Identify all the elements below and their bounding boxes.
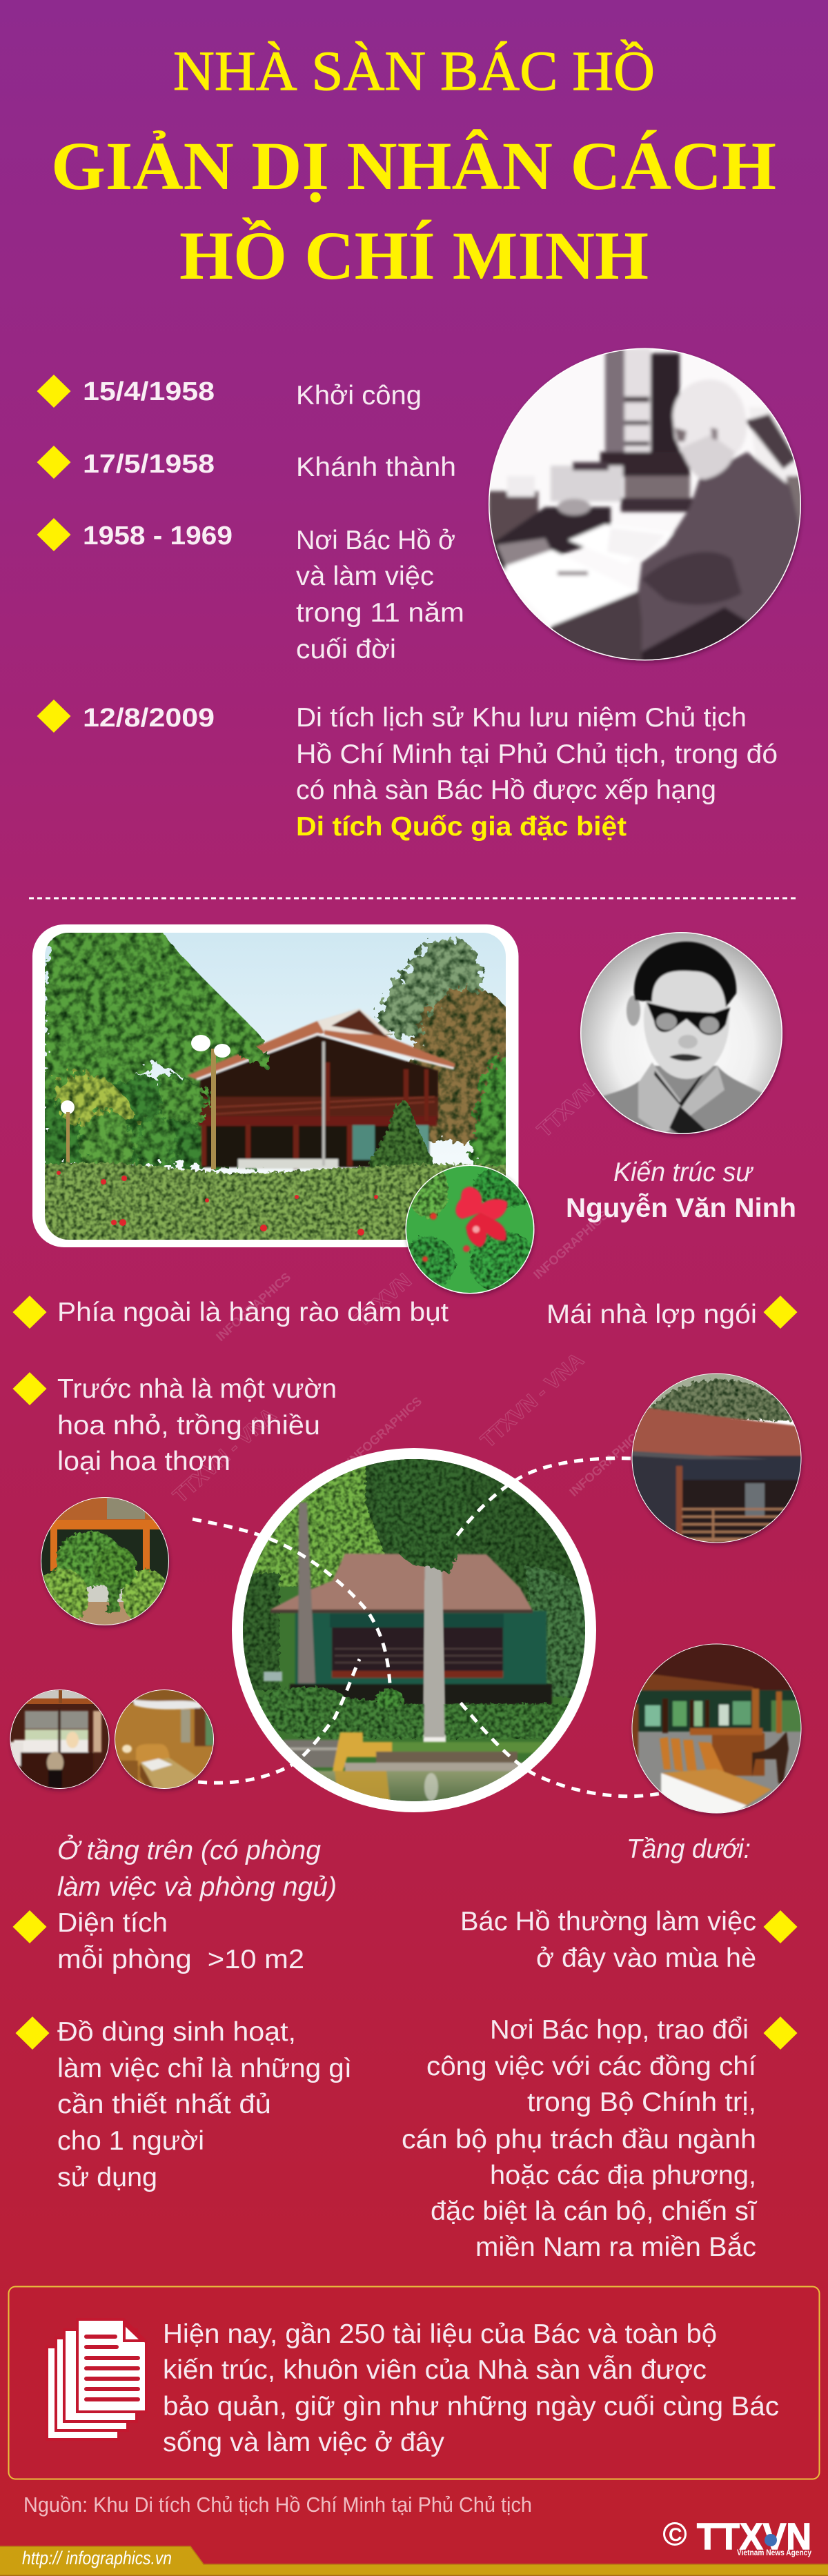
- timeline item 15/4/1958: [37, 375, 422, 410]
- watermarks: INFOGRAPHICS: [531, 1208, 611, 1282]
- watermarks: [169, 1080, 647, 1507]
- architect caption: Nguyễn Văn Ninh: [566, 1193, 796, 1223]
- timeline item 17/5/1958: 17/5/1958: [83, 450, 215, 479]
- architect caption: [566, 1158, 796, 1223]
- note: lower floor meetings: Nơi Bác họp, trao đổi: [490, 2015, 749, 2045]
- note: upper floor rooms: mỗi phòng >10 m2: [57, 1945, 304, 1974]
- photo: hibiscus: [400, 1162, 542, 1297]
- note: roof: Mái nhà lợp ngói: [546, 1300, 757, 1329]
- note: flower garden: loại hoa thơm: [57, 1447, 230, 1476]
- callout text: [163, 2319, 779, 2457]
- note: lower floor meetings: đặc biệt là cán bộ, chiến sĩ: [431, 2197, 758, 2226]
- photo: lower floor hall: [628, 1642, 807, 1818]
- timeline item 12/8/2009: 12/8/2009: [83, 704, 215, 733]
- timeline item 1958 - 1969: trong 11 năm: [296, 598, 464, 628]
- callout text: kiến trúc, khuôn viên của Nhà sàn vẫn được: [163, 2355, 707, 2385]
- note: upper floor furniture: cần thiết nhất đủ: [57, 2090, 271, 2119]
- divider: [29, 897, 798, 900]
- timeline item 1958 - 1969: và làm việc: [296, 562, 434, 591]
- timeline item 1958 - 1969: Nơi Bác Hồ ở: [296, 526, 455, 555]
- logo: TTXVN: TTXVN: [697, 2516, 811, 2557]
- title: [51, 39, 776, 294]
- note: flower garden: Trước nhà là một vườn: [57, 1374, 337, 1404]
- note: upper floor furniture: [15, 2017, 352, 2192]
- timeline item 1958 - 1969: 1958 - 1969: [83, 522, 233, 551]
- note: lower floor meetings: hoặc các địa phương,: [490, 2161, 756, 2190]
- watermarks: TTXVN: [533, 1080, 599, 1142]
- flowers in hedge: [57, 1171, 378, 1236]
- back trees: [380, 938, 514, 1173]
- note: lower floor summer: Tầng dưới:: [627, 1834, 751, 1864]
- timeline item 12/8/2009: Di tích Quốc gia đặc biệt: [296, 812, 627, 842]
- note: upper floor furniture: Đồ dùng sinh hoạt,: [57, 2017, 296, 2047]
- timeline item 17/5/1958: Khánh thành: [296, 453, 456, 482]
- source note: Nguồn: Khu Di tích Chủ tịch Hồ Chí Minh tại Phủ Chủ tịch: [23, 2493, 532, 2517]
- timeline item 1958 - 1969: cuối đời: [296, 635, 396, 664]
- note: upper floor furniture: cho 1 người: [57, 2126, 204, 2156]
- back green trees: [45, 933, 265, 1171]
- note: upper floor furniture: sử dụng: [57, 2163, 157, 2192]
- timeline item 1958 - 1969: [37, 518, 464, 664]
- timeline item 12/8/2009: có nhà sàn Bác Hồ được xếp hạng: [296, 775, 716, 805]
- connector: garden: [193, 1519, 390, 1683]
- callout: preservation box: [8, 2286, 820, 2479]
- note: lower floor meetings: miền Nam ra miền Bắc: [475, 2232, 756, 2262]
- logo: TTXVN: Vietnam News Agency: [737, 2549, 812, 2557]
- connector: roof: [453, 1458, 631, 1540]
- panel: stilt house photo: [28, 924, 519, 1249]
- note: upper floor furniture: làm việc chỉ là những gì: [57, 2054, 352, 2083]
- watermarks: INFOGRAPHICS: [566, 1425, 647, 1499]
- note: lower floor meetings: cán bộ phụ trách đầu ngành: [402, 2125, 756, 2154]
- house: [187, 1009, 455, 1169]
- callout text: bảo quản, giữ gìn như những ngày cuối cùng Bác: [163, 2392, 779, 2421]
- photo: working room: [10, 1690, 110, 1790]
- title: HỒ CHÍ MINH: [179, 217, 649, 294]
- timeline item 12/8/2009: Hồ Chí Minh tại Phủ Chủ tịch, trong đó: [296, 740, 778, 769]
- timeline item 15/4/1958: Khởi công: [296, 381, 422, 410]
- watermarks: TTXVN: [351, 1269, 416, 1331]
- callout text: sống và làm việc ở đây: [163, 2428, 445, 2457]
- overlapping foliage: [158, 1035, 272, 1123]
- note: hedge: Phía ngoài là hàng rào dâm bụt: [57, 1298, 448, 1327]
- watermarks: INFOGRAPHICS: [213, 1270, 293, 1344]
- photo: garden topiary: [36, 1494, 172, 1629]
- note: upper floor rooms: Diện tích: [57, 1908, 168, 1938]
- connector: upper rooms: [198, 1659, 359, 1783]
- note: upper floor rooms: làm việc và phòng ngủ): [57, 1872, 337, 1902]
- architect caption: Kiến trúc sư: [613, 1158, 753, 1187]
- footer bar: [0, 2546, 828, 2576]
- photo: Bác Hồ at desk: [483, 345, 807, 673]
- timeline item 15/4/1958: 15/4/1958: [83, 377, 215, 406]
- note: lower floor summer: Bác Hồ thường làm việc: [460, 1907, 756, 1936]
- watermarks: INFOGRAPHICS: [344, 1394, 424, 1468]
- note: upper floor rooms: [12, 1834, 337, 1974]
- note: flower garden: hoa nhỏ, trồng nhiều: [57, 1411, 320, 1440]
- watermarks: TTXVN - VNA: [169, 1404, 281, 1507]
- photo: bedroom: [115, 1690, 215, 1790]
- timeline item 17/5/1958: [37, 446, 456, 482]
- lamp posts: [61, 1035, 230, 1171]
- icon: documents: [47, 2319, 146, 2439]
- photo: architect portrait: [576, 928, 790, 1142]
- timeline item 12/8/2009: [37, 700, 778, 842]
- logo: TTXVN: C: [669, 2524, 682, 2545]
- note: lower floor summer: ở đây vào mùa hè: [536, 1943, 756, 1973]
- watermarks: TTXVN - VNA: [477, 1349, 589, 1452]
- photo: roof close-up: [628, 1369, 807, 1545]
- note: flower garden: [12, 1372, 337, 1476]
- photo: main house circle: [232, 1448, 596, 1814]
- connector: lower floor: [457, 1698, 659, 1796]
- timeline item 12/8/2009: Di tích lịch sử Khu lưu niệm Chủ tịch: [296, 703, 747, 733]
- panel: timeline: [37, 375, 778, 842]
- foreground hedge: [45, 1100, 506, 1240]
- title: NHÀ SÀN BÁC HỒ: [173, 39, 655, 102]
- footer bar: http:// infographics.vn: [22, 2548, 172, 2568]
- note: upper floor rooms: Ở tầng trên (có phòng: [57, 1834, 321, 1865]
- note: lower floor summer: [460, 1834, 798, 1973]
- note: lower floor meetings: [402, 2015, 798, 2262]
- note: lower floor meetings: công việc với các đồng chí: [426, 2052, 756, 2081]
- note: lower floor meetings: trong Bộ Chính trị,: [527, 2088, 756, 2117]
- title: GIẢN DỊ NHÂN CÁCH: [51, 128, 776, 204]
- callout text: Hiện nay, gần 250 tài liệu của Bác và toàn bộ: [163, 2319, 717, 2349]
